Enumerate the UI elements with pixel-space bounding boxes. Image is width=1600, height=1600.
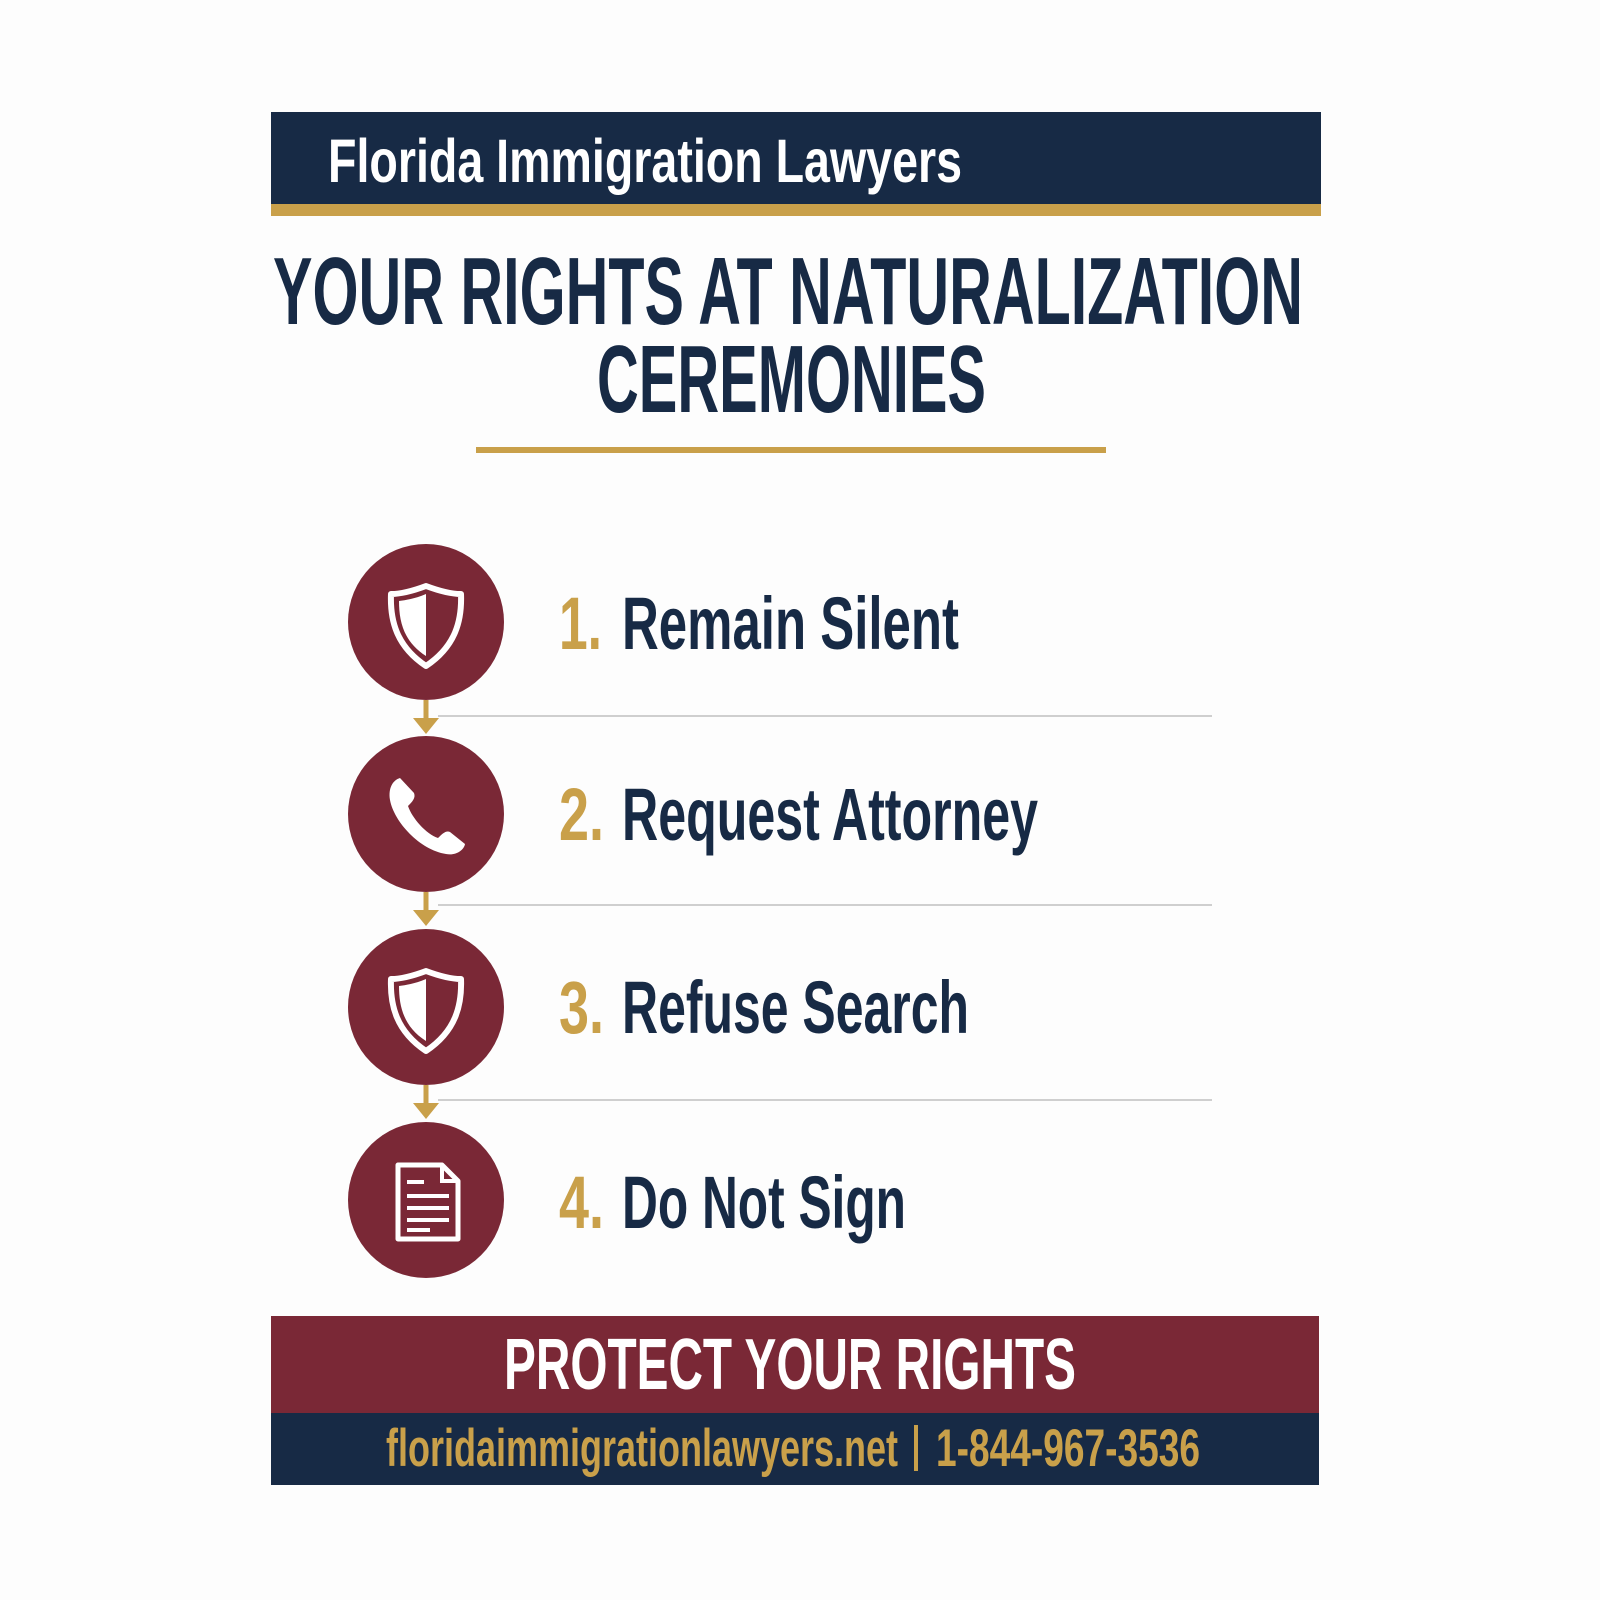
item 2: request attorney: Request Attorney xyxy=(622,773,1038,856)
icon: phone xyxy=(348,736,504,892)
title xyxy=(273,238,1303,433)
header text: Florida Immigration Lawyers xyxy=(328,127,962,195)
contact line: 1-844-967-3536 xyxy=(936,1419,1200,1478)
item 4: do not sign xyxy=(348,1122,906,1278)
item 3: refuse search xyxy=(348,929,969,1085)
item 4: do not sign: Do Not Sign xyxy=(622,1161,906,1244)
item 4: do not sign: 4. xyxy=(559,1161,604,1244)
contact line: floridaimmigrationlawyers.net xyxy=(386,1419,898,1478)
header bar xyxy=(271,112,1321,216)
footer banner xyxy=(271,1316,1319,1485)
item 3: refuse search: Refuse Search xyxy=(622,966,969,1049)
item 1: remain silent: Remain Silent xyxy=(622,582,959,665)
icon: shield xyxy=(348,929,504,1085)
separators xyxy=(438,716,1212,1100)
footer banner: PROTECT YOUR RIGHTS xyxy=(504,1325,1076,1405)
item 2: request attorney: 2. xyxy=(559,773,604,856)
item 2: request attorney xyxy=(348,736,1038,892)
title: CEREMONIES xyxy=(597,326,986,433)
item 3: refuse search: 3. xyxy=(559,966,604,1049)
icon: document xyxy=(348,1122,504,1278)
icon: shield xyxy=(348,544,504,700)
arrows xyxy=(413,700,439,1119)
title underline xyxy=(476,447,1106,453)
item 1: remain silent xyxy=(348,544,959,700)
item 1: remain silent: 1. xyxy=(559,582,602,665)
